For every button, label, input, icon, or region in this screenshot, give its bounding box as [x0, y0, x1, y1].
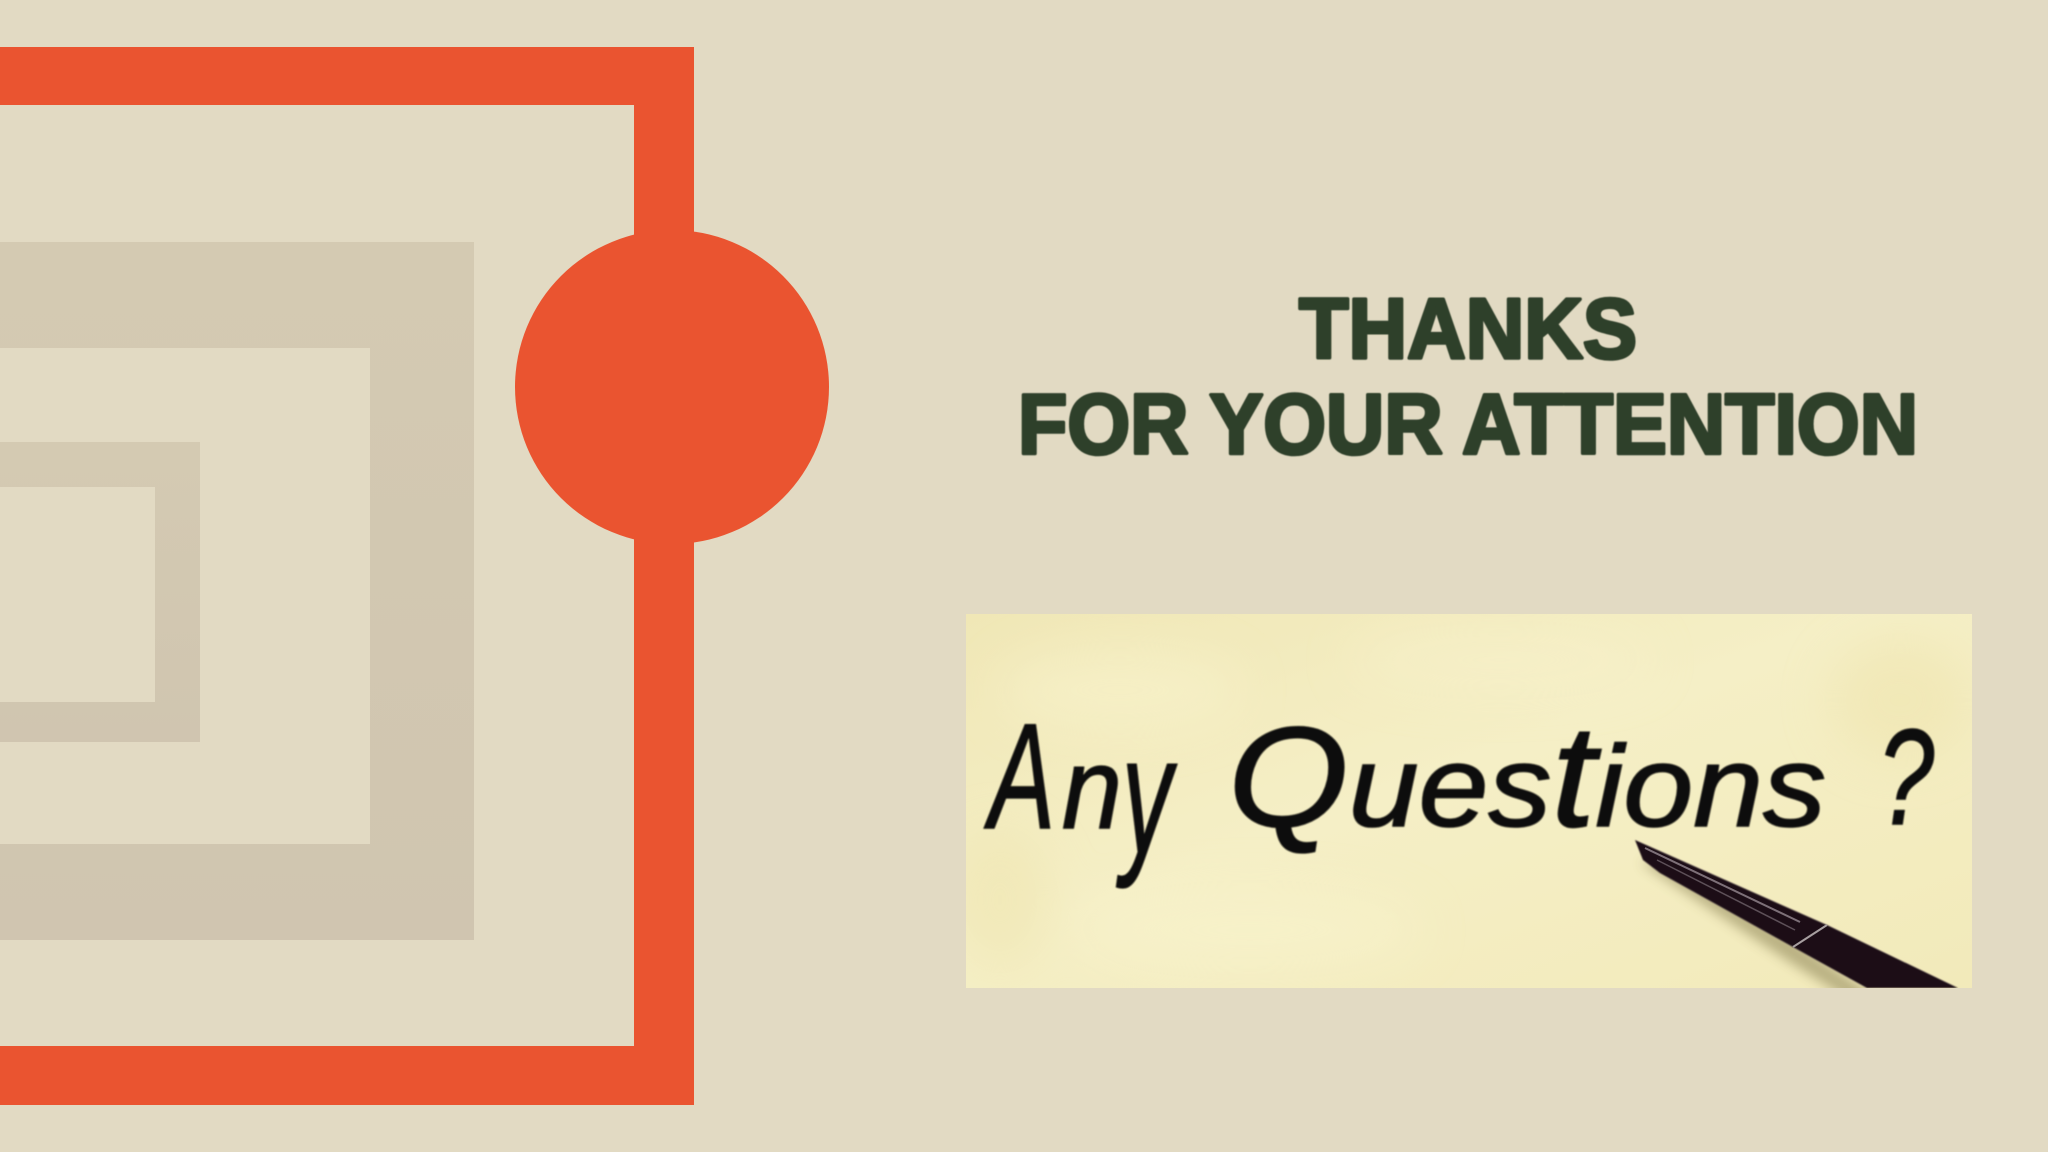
handwritten words: ? [1878, 701, 1934, 853]
handwritten words: Questions [1228, 695, 1826, 857]
title: THANKS [1299, 282, 1637, 377]
pen [1635, 840, 1958, 1000]
handwritten words: n [1062, 725, 1122, 853]
orange square frame [0, 47, 694, 1105]
title: FOR YOUR ATTENTION [1018, 378, 1918, 472]
handwritten words: A [984, 692, 1055, 860]
title [1018, 282, 1918, 472]
handwritten words [982, 722, 1936, 890]
orange circle [515, 230, 829, 544]
handwritten words: y [1116, 701, 1177, 889]
inner beige square frame [0, 442, 200, 742]
outer beige square frame [0, 242, 474, 940]
photo: any questions handwritten note [950, 614, 1972, 1000]
